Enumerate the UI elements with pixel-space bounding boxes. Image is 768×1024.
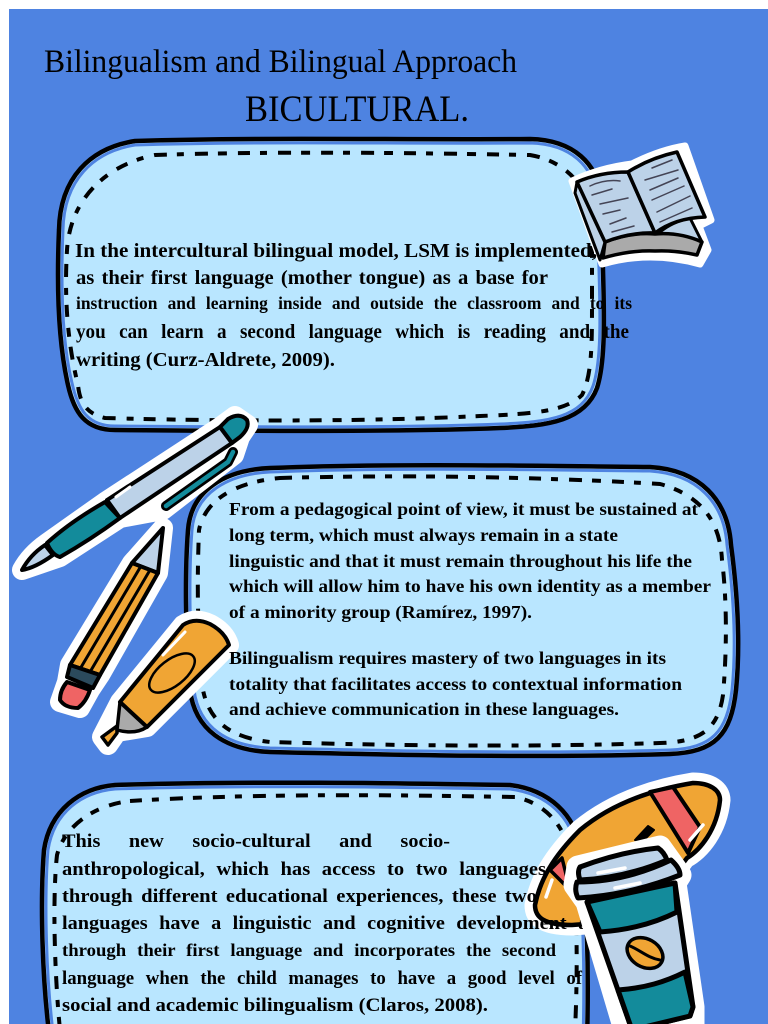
text block: pedagogical point of view <box>229 499 711 719</box>
text block: socio-cultural: through different educational experiences, these two <box>62 886 537 907</box>
text block: socio-cultural: languages have a linguistic and cognitive development at <box>62 913 596 934</box>
title <box>44 44 517 130</box>
text block: pedagogical point of view: totality that facilitates access to contextual information <box>229 674 682 694</box>
panel: pedagogical point of view box <box>186 465 738 756</box>
text block: pedagogical point of view: and achieve communication in these languages. <box>229 699 619 719</box>
text block: socio-cultural: social and academic bilingualism (Claros, 2008). <box>62 995 488 1016</box>
text block: pedagogical point of view: which will allow him to have his own identity as a member <box>229 576 711 596</box>
text block: pedagogical point of view: From a pedagogical point of view, it must be sustained at <box>229 499 698 519</box>
icon: highlighter <box>102 621 229 745</box>
text block: intercultural model: you can learn a second language which is reading and the <box>76 321 629 343</box>
text block: pedagogical point of view: Bilingualism requires mastery of two languages in its <box>229 648 666 668</box>
text block: pedagogical point of view: long term, which must always remain in a state <box>229 525 618 545</box>
text block: socio-cultural: through their first language and incorporates the second <box>62 940 556 960</box>
text block: pedagogical point of view: of a minority group (Ramírez, 1997). <box>229 602 532 622</box>
text block: intercultural model: instruction and learning inside and outside the classroom and to its <box>76 293 632 313</box>
icon: pen <box>22 416 248 570</box>
text block: socio-cultural: language when the child manages to have a good level of <box>62 968 583 989</box>
text block: intercultural model: writing (Curz-Aldrete, 2009). <box>76 349 335 371</box>
text block: intercultural model: as their first language (mother tongue) as a base for <box>76 267 548 289</box>
text block: socio-cultural <box>62 831 596 1016</box>
icon: coffee cup <box>575 847 693 1024</box>
icon: bread roll <box>535 783 720 925</box>
title: Bilingualism and Bilingual Approach <box>44 44 517 80</box>
text block: intercultural model: In the intercultural bilingual model, LSM is implemented, <box>75 240 597 262</box>
icon: open book <box>572 146 711 264</box>
panel: socio-cultural box <box>42 783 588 1024</box>
text block: socio-cultural: This new socio-cultural and socio- <box>62 831 450 852</box>
panel: intercultural model box <box>58 139 604 431</box>
text block: socio-cultural: anthropological, which has access to two languages <box>62 859 546 880</box>
text block: pedagogical point of view: linguistic and that it must remain throughout his life the <box>229 551 692 571</box>
icon: pencil <box>60 528 163 708</box>
text block: intercultural model <box>75 240 632 371</box>
title: BICULTURAL. <box>245 89 469 130</box>
